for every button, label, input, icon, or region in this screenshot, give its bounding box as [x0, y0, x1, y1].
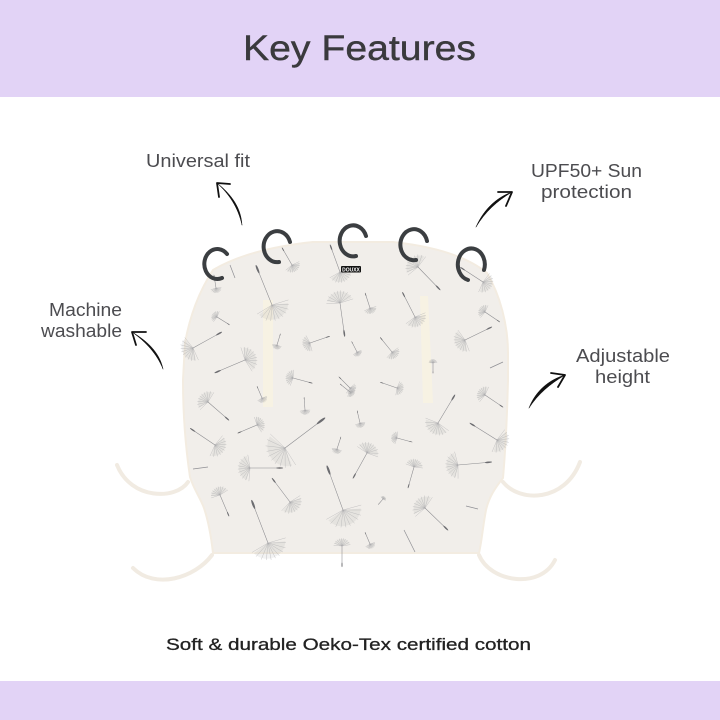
label: Universal fit: Universal fit: [146, 151, 250, 171]
dandelion print: [176, 240, 514, 567]
label: UPF50+ Sun protection: UPF50+ Sun: [531, 161, 642, 181]
arrow: Adjustable height: [529, 373, 565, 408]
fabric panel: [183, 242, 508, 553]
label: Adjustable height: Adjustable: [576, 346, 670, 366]
product: sun shade canopy: [117, 225, 580, 580]
label: Adjustable height: height: [595, 367, 650, 387]
rings: [204, 225, 485, 280]
straps: [117, 462, 580, 580]
cream strap: left: [263, 300, 273, 407]
brand tag: DOUXX: [342, 267, 361, 273]
cream strap: right: [420, 296, 433, 403]
caption: Soft & durable Oeko-Tex certified cotton: [166, 635, 531, 654]
label: Machine washable: washable: [40, 321, 122, 341]
label: UPF50+ Sun protection: protection: [541, 182, 632, 202]
arrow: UPF50+ Sun protection: [476, 192, 512, 227]
top banner: [0, 0, 720, 97]
title: Key Features: [243, 29, 476, 68]
bottom banner: [0, 681, 720, 720]
arrow: Machine washable: [132, 332, 163, 369]
label: Machine washable: Machine: [49, 300, 122, 320]
arrow: Universal fit: [217, 183, 242, 225]
